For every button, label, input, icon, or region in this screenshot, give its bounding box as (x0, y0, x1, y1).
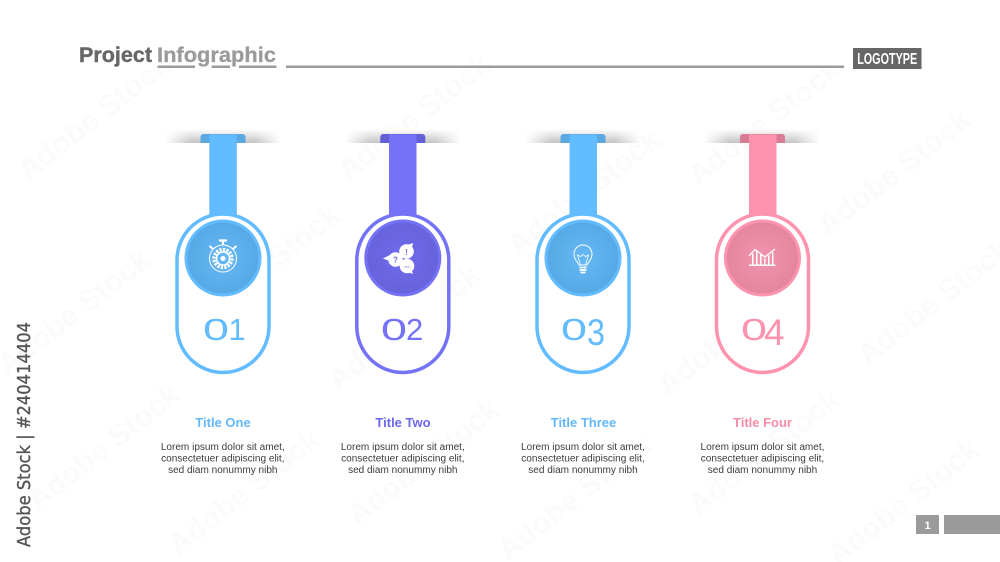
title: Project (79, 44, 152, 67)
pill outline 1 (177, 214, 269, 372)
panel: step 2 (341, 129, 465, 476)
watermark: Adobe Stock (682, 383, 847, 522)
description 4 (701, 442, 824, 476)
stock credit: Adobe Stock | #240414404 (15, 322, 35, 547)
number 04: 0 (741, 312, 767, 347)
description 1: consectetuer adipiscing elit, (161, 454, 285, 464)
number 02: 0 (381, 312, 407, 347)
watermark: Adobe Stock (182, 198, 347, 337)
description 2: consectetuer adipiscing elit, (341, 454, 465, 464)
ceiling shadow 4 (704, 129, 820, 143)
header rule (286, 66, 844, 68)
watermark: Adobe Stock (322, 258, 487, 397)
description 1: Lorem ipsum dolor sit amet, (161, 442, 285, 453)
description 4: sed diam nonummy nibh (708, 465, 817, 476)
number 04: 4 (764, 312, 785, 353)
icon: speech bubbles: ... (404, 262, 410, 270)
title two: Title Two (375, 415, 431, 430)
ceiling shadow 3 (525, 129, 641, 143)
watermark: Adobe Stock (652, 263, 817, 402)
logotype: LOGOTYPE (857, 51, 917, 68)
icon: speech bubbles: ? (393, 256, 398, 264)
number 02: 2 (406, 312, 423, 347)
watermark: Adobe Stock (22, 378, 187, 517)
watermark: Adobe Stock (502, 123, 667, 262)
icon circle 1 (184, 220, 262, 296)
ribbon 2 (380, 134, 425, 214)
panel: step 4 (701, 129, 824, 476)
title: Infographic (157, 44, 276, 67)
watermark: Adobe Stock (682, 53, 847, 192)
icon circle 3 (544, 220, 622, 296)
title one: Title One (195, 415, 251, 430)
panel: step 1 (161, 129, 285, 476)
icon circle 4 (724, 220, 801, 296)
watermark: Adobe Stock (812, 103, 977, 242)
description 2: sed diam nonummy nibh (348, 465, 458, 476)
number 03: 0 (561, 312, 587, 347)
description 3: sed diam nonummy nibh (528, 465, 638, 476)
ceiling shadow 2 (345, 129, 461, 143)
icon: light bulb (574, 245, 592, 272)
ribbon 1 (200, 134, 246, 214)
page bar (944, 515, 1000, 534)
icon: speech bubbles: ! (405, 248, 408, 257)
title four: Title Four (733, 415, 792, 430)
page number (916, 515, 939, 534)
icon: stopwatch gear (210, 240, 236, 272)
description 2: Lorem ipsum dolor sit amet, (341, 442, 465, 453)
watermark: Adobe Stock (162, 423, 327, 562)
description 3 (521, 442, 645, 476)
ribbon 4 (740, 134, 785, 214)
description 4: Lorem ipsum dolor sit amet, (701, 442, 824, 453)
number 04 (741, 312, 785, 353)
watermark: Adobe Stock (12, 48, 177, 187)
pill outline 4 (716, 214, 808, 372)
watermark: Adobe Stock (332, 48, 497, 187)
title (79, 44, 276, 68)
page number: 1 (924, 520, 931, 532)
number 02 (381, 312, 423, 347)
description 3: consectetuer adipiscing elit, (521, 454, 645, 464)
description 3: Lorem ipsum dolor sit amet, (521, 442, 645, 453)
panel: step 3 (521, 129, 645, 476)
description 1: sed diam nonummy nibh (168, 465, 278, 476)
number 03 (561, 312, 605, 353)
icon: speech bubbles (383, 243, 414, 274)
icon circle 2 (364, 220, 441, 296)
pill outline 2 (357, 214, 449, 372)
ceiling shadow 1 (165, 129, 281, 143)
description 4: consectetuer adipiscing elit, (701, 454, 824, 464)
logotype (853, 48, 922, 69)
number 01 (203, 312, 246, 347)
pill outline 3 (537, 214, 629, 372)
description 1 (161, 442, 285, 476)
number 01: 1 (228, 312, 246, 347)
title three: Title Three (551, 415, 616, 430)
ribbon 3 (560, 134, 606, 214)
icon: bar chart (749, 249, 776, 266)
watermark: Adobe Stock (342, 393, 507, 532)
description 2 (341, 442, 465, 476)
number 01: 0 (203, 312, 229, 347)
number 03: 3 (587, 312, 605, 353)
